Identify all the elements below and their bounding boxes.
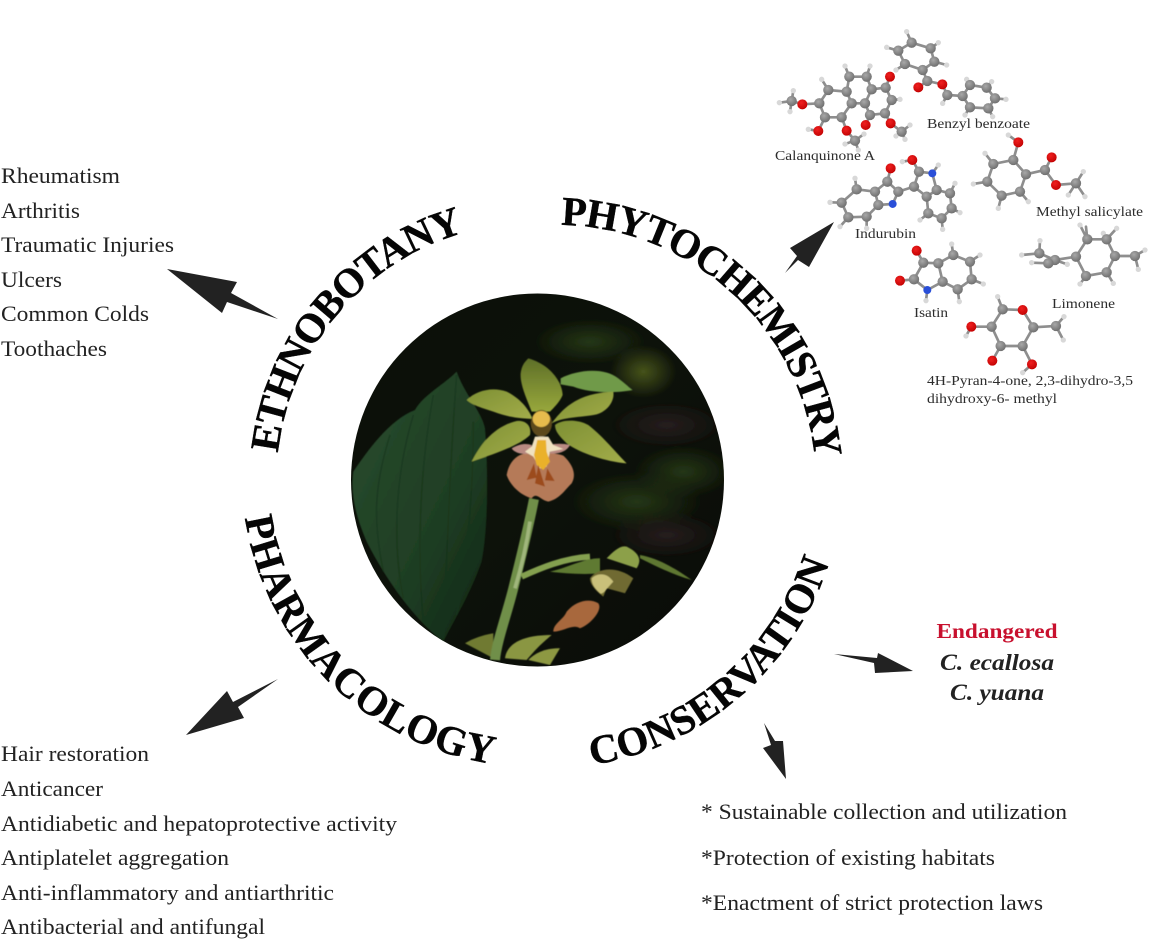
sepals <box>521 358 563 412</box>
molecule: calanquinone A <box>777 63 913 153</box>
molecule: isatin <box>895 241 986 304</box>
molecule: methyl salicylate <box>971 132 1088 211</box>
molecule labels: dihydroxy-6- methyl <box>927 391 1057 406</box>
arrow: pharmacology to activities <box>186 679 278 735</box>
bud <box>561 371 633 392</box>
molecule labels: Limonene <box>1052 296 1115 311</box>
callout: endangered species: Endangered <box>936 619 1058 643</box>
list: ethnobotany uses: Traumatic Injuries <box>1 232 174 257</box>
molecules panel <box>777 29 1148 375</box>
list: ethnobotany uses: Rheumatism <box>1 163 120 188</box>
list: pharmacology activities: Antiplatelet aggregation <box>1 845 229 870</box>
list: conservation measures: *Protection of existing habitats <box>701 845 995 870</box>
arrow: conservation to endangered species <box>834 653 913 673</box>
arrow: phytochemistry to compounds <box>785 222 834 273</box>
molecule labels <box>775 116 1143 406</box>
heading: CONSERVATION: CONSERVATION <box>590 553 828 764</box>
side branch <box>522 557 590 577</box>
molecule labels: Benzyl benzoate <box>927 116 1030 131</box>
heading: PHARMACOLOGY: PHARMACOLOGY <box>244 513 498 764</box>
molecule: limonene <box>1019 222 1148 287</box>
list: pharmacology activities: Anti-inflammatory and antiarthritic <box>1 880 334 905</box>
lip <box>507 453 574 502</box>
background foliage blotches <box>533 318 733 558</box>
arrow: ethnobotany to uses <box>167 269 278 319</box>
molecule labels: 4H-Pyran-4-one, 2,3-dihydro-3,5 <box>927 373 1133 388</box>
list: pharmacology activities <box>1 741 397 939</box>
arrow: conservation to measures <box>763 723 786 779</box>
molecule labels: Isatin <box>914 305 948 320</box>
callout: endangered species: C. ecallosa <box>940 650 1054 675</box>
molecule: benzyl benzoate <box>884 29 1009 119</box>
list: pharmacology activities: Antibacterial and antifungal <box>1 914 265 939</box>
list: conservation measures <box>701 799 1067 915</box>
photo: orchid in circle <box>345 290 733 670</box>
list: ethnobotany uses: Common Colds <box>1 301 149 326</box>
stem <box>495 499 534 660</box>
heading: ETHNOBOTANY: ETHNOBOTANY <box>251 206 458 452</box>
callout: endangered species: C. yuana <box>950 680 1044 705</box>
list: ethnobotany uses: Ulcers <box>1 267 62 292</box>
list: ethnobotany uses <box>1 163 174 361</box>
list: conservation measures: *Enactment of strict protection laws <box>701 890 1043 915</box>
molecule labels: Calanquinone A <box>775 148 875 163</box>
molecule labels: Methyl salicylate <box>1036 204 1143 219</box>
list: conservation measures: * Sustainable collection and utilization <box>701 799 1067 824</box>
molecule labels: Indurubin <box>855 226 916 241</box>
list: pharmacology activities: Hair restoration <box>1 741 149 766</box>
large leaf <box>352 372 487 642</box>
list: pharmacology activities: Antidiabetic and hepatoprotective activity <box>1 811 397 836</box>
column <box>531 410 552 437</box>
list: ethnobotany uses: Toothaches <box>1 336 107 361</box>
callout: endangered species <box>936 619 1058 705</box>
lower leaves <box>465 633 493 658</box>
molecule: 4H-pyran-4-one <box>963 294 1067 375</box>
heading: PHYTOCHEMISTRY: PHYTOCHEMISTRY <box>562 198 842 454</box>
molecule: indurubin <box>827 155 963 232</box>
list: ethnobotany uses: Arthritis <box>1 198 80 223</box>
list: pharmacology activities: Anticancer <box>1 776 104 801</box>
